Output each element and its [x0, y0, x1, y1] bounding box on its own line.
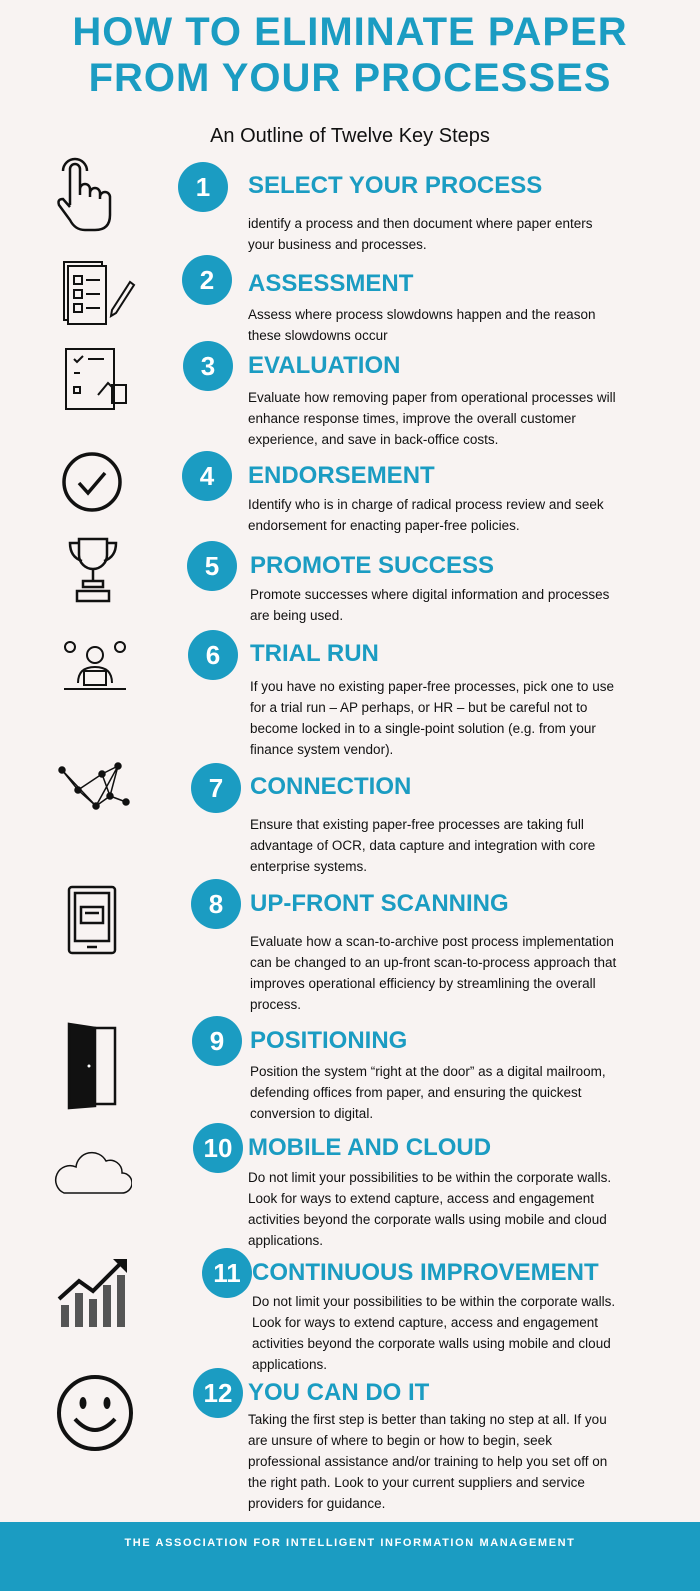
text: Evaluate how a scan-to-archive post process implementation can be changed to an up-front scan-to-process approach that improves operational efficiency by streamlining the overall process. — [250, 934, 616, 1012]
number 2: 2 — [200, 265, 214, 295]
number 11: 11 — [213, 1258, 241, 1288]
number 4 — [182, 451, 232, 501]
heading: CONTINUOUS IMPROVEMENT — [252, 1259, 599, 1286]
number 10 — [193, 1123, 243, 1173]
text: Assess where process slowdowns happen and the reason these slowdowns occur — [248, 307, 595, 343]
icon: trophy — [68, 538, 118, 602]
icon: tablet scanner — [68, 886, 116, 954]
number 9: 9 — [210, 1026, 224, 1056]
heading: CONNECTION — [250, 773, 411, 800]
icon: person with laptop — [64, 641, 126, 690]
text: Identify who is in charge of radical process review and seek endorsement for enacting paper-free policies. — [248, 497, 604, 533]
number 1: 1 — [196, 172, 210, 202]
number 12 — [193, 1368, 243, 1418]
heading: EVALUATION — [248, 352, 400, 379]
heading: ASSESSMENT — [248, 270, 413, 297]
number 6 — [188, 630, 238, 680]
number 1 — [178, 162, 228, 212]
step 8 — [68, 879, 616, 1012]
text: Position the system “right at the door” as a digital mailroom, defending offices from paper, and ensuring the quickest conversion to digital. — [250, 1064, 606, 1121]
text: Do not limit your possibilities to be within the corporate walls. Look for ways to extend capture, access and engagement activities beyond the corporate walls using mobile and cloud applications. — [248, 1170, 611, 1248]
heading: YOU CAN DO IT — [248, 1379, 429, 1406]
text: identify a process and then document where paper enters your business and processes. — [248, 216, 592, 252]
number 2 — [182, 255, 232, 305]
icon: smiley — [57, 1375, 133, 1451]
number 11 — [202, 1248, 252, 1298]
icon: growth chart — [58, 1259, 127, 1327]
step 2 — [63, 255, 595, 343]
number 6: 6 — [206, 640, 220, 670]
heading: UP-FRONT SCANNING — [250, 890, 509, 917]
title — [72, 10, 628, 100]
icon: cloud — [54, 1152, 132, 1194]
step 3 — [65, 341, 616, 447]
number 8 — [191, 879, 241, 929]
heading: ENDORSEMENT — [248, 462, 435, 489]
step 4 — [62, 451, 604, 533]
step 6 — [64, 630, 614, 757]
heading: TRIAL RUN — [250, 640, 379, 667]
step 10 — [54, 1123, 611, 1248]
icon: hand pointer — [57, 158, 112, 232]
heading: MOBILE AND CLOUD — [248, 1134, 491, 1161]
text: If you have no existing paper-free processes, pick one to use for a trial run – AP perhaps, or HR – but be careful not to become locked in to a single-point solution (e.g. from your finance system vendor). — [250, 679, 614, 757]
number 7: 7 — [209, 773, 223, 803]
text: Do not limit your possibilities to be within the corporate walls. Look for ways to extend capture, access and engagement activities beyond the corporate walls using mobile and cloud applications. — [252, 1294, 615, 1372]
number 10: 10 — [204, 1133, 232, 1163]
text: Taking the first step is better than taking no step at all. If you are unsure of where to begin or how to begin, seek professional assistance and/or training to help you set off on the right path. Look to your current suppliers and service providers for guidance. — [248, 1412, 607, 1511]
title: HOW TO ELIMINATE PAPER — [72, 10, 628, 54]
icon: check circle — [62, 452, 122, 512]
number 4: 4 — [200, 461, 214, 491]
number 12: 12 — [204, 1378, 232, 1408]
title: FROM YOUR PROCESSES — [89, 56, 611, 100]
number 8: 8 — [209, 889, 223, 919]
step 12 — [57, 1368, 607, 1511]
icon: evaluation board — [65, 348, 127, 410]
step 7 — [58, 762, 595, 874]
heading: PROMOTE SUCCESS — [250, 552, 494, 579]
text: Ensure that existing paper-free processes are taking full advantage of OCR, data capture and integration with core enterprise systems. — [250, 817, 595, 874]
step 11 — [58, 1248, 615, 1372]
text: Evaluate how removing paper from operational processes will enhance response times, improve the overall customer experience, and save in back-office costs. — [248, 390, 616, 447]
number 9 — [192, 1016, 242, 1066]
subtitle: An Outline of Twelve Key Steps — [210, 125, 490, 147]
number 3: 3 — [201, 351, 215, 381]
text: Promote successes where digital information and processes are being used. — [250, 587, 609, 623]
footer — [0, 1522, 700, 1591]
heading: POSITIONING — [250, 1027, 407, 1054]
number 7 — [191, 763, 241, 813]
footer: THE ASSOCIATION FOR INTELLIGENT INFORMATION MANAGEMENT — [124, 1537, 576, 1549]
number 5 — [187, 541, 237, 591]
step 5 — [68, 538, 609, 623]
number 5: 5 — [205, 551, 219, 581]
icon: network — [58, 762, 130, 810]
step 1 — [57, 158, 592, 252]
icon: checklist — [63, 261, 136, 325]
heading: SELECT YOUR PROCESS — [248, 172, 542, 199]
icon: door — [68, 1022, 116, 1110]
number 3 — [183, 341, 233, 391]
step 9 — [68, 1016, 606, 1121]
